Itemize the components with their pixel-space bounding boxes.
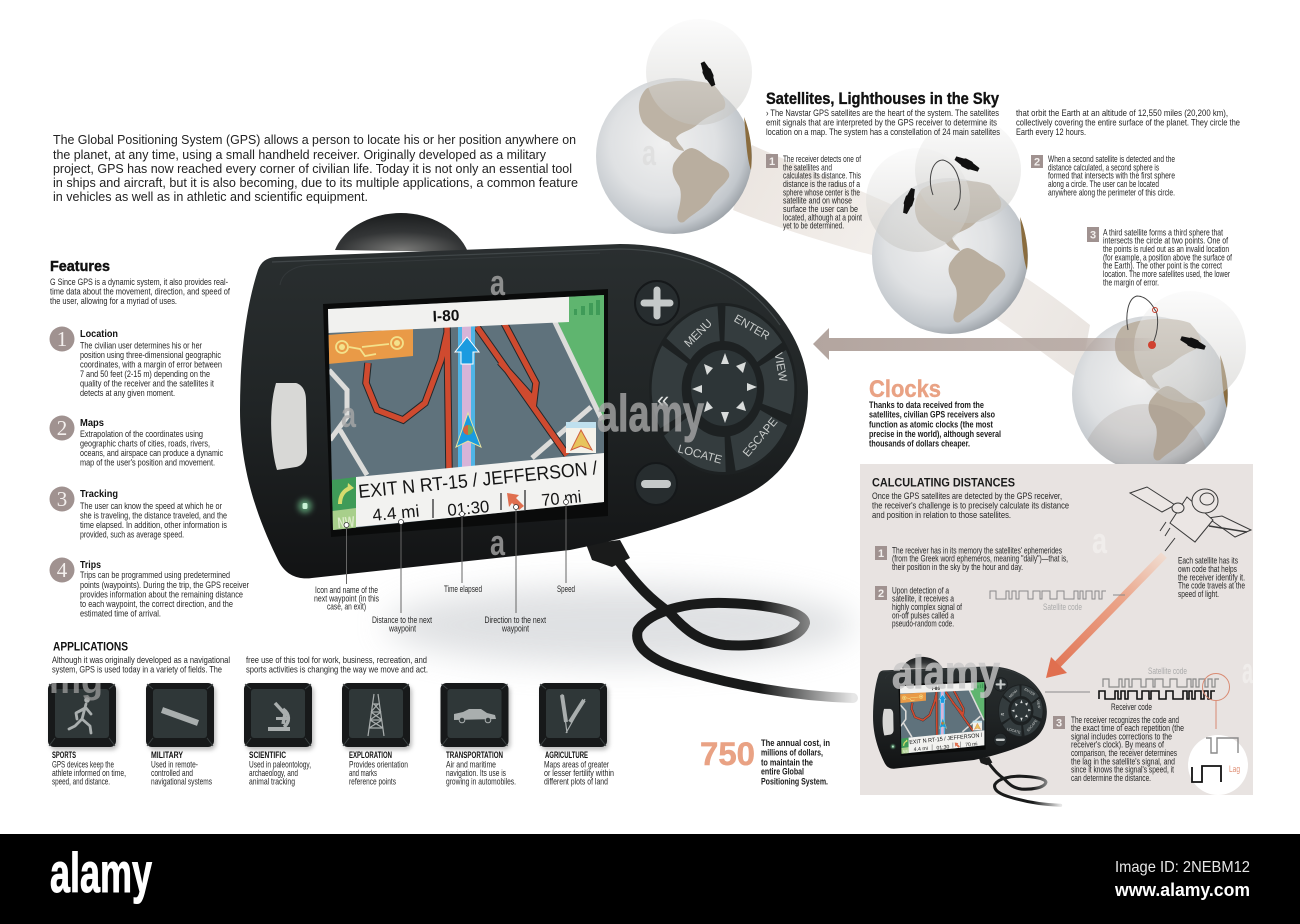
feature 3: tracking: 3 bbox=[57, 487, 67, 511]
feature 3: tracking: time elapsed. In addition, other information is bbox=[80, 520, 227, 530]
callout: direction: waypoint bbox=[501, 624, 529, 634]
callout: distance: waypoint bbox=[388, 624, 416, 634]
application: agriculture: different plots of land bbox=[544, 776, 608, 786]
feature 4: trips: 4 bbox=[57, 558, 68, 582]
feature 3: tracking: provided, such as average speed. bbox=[80, 530, 184, 540]
features heading: Features bbox=[50, 258, 110, 275]
feature 3: tracking: Tracking bbox=[80, 489, 118, 500]
panel intro: and position in relation to those satellites. bbox=[872, 510, 1011, 520]
device shadow bbox=[385, 585, 855, 665]
calc step 3: receiver's clock). By means of bbox=[1071, 740, 1164, 750]
intro text: the planet, at any time, using a small handheld receiver. Originally developed as a military bbox=[53, 148, 547, 162]
watermarks: a bbox=[490, 262, 506, 303]
calc step 2 bbox=[875, 585, 962, 629]
calc step 1 bbox=[875, 545, 1068, 572]
application: military: navigational systems bbox=[151, 776, 212, 786]
application: scientific: Used in paleontology, bbox=[249, 760, 311, 770]
annual cost stat: Positioning System. bbox=[761, 776, 828, 786]
feature 4: trips: Trips bbox=[80, 560, 101, 571]
callout: next waypoint icon: case, an exit) bbox=[327, 602, 366, 612]
application: agriculture: AGRICULTURE bbox=[545, 750, 588, 760]
applications intro: free use of this tool for work, business, recreation, and bbox=[246, 655, 427, 665]
callout: next waypoint icon: next waypoint (in this bbox=[314, 593, 379, 603]
arrow: position to device bbox=[813, 328, 1152, 360]
lag detail bbox=[1188, 674, 1248, 795]
step 2: distance calculated, a second sphere is bbox=[1048, 162, 1159, 172]
callout: next waypoint icon: Icon and name of the bbox=[315, 585, 378, 595]
step 1: yet to be determined. bbox=[783, 221, 844, 231]
calc step 2: pseudo-random code. bbox=[892, 619, 954, 629]
satellite code wave bbox=[990, 591, 1125, 612]
panel intro: Once the GPS satellites are detected by the GPS receiver, bbox=[872, 491, 1062, 501]
application: transportation: Air and maritime bbox=[446, 760, 496, 770]
application: exploration bbox=[342, 683, 412, 786]
step 3: A third satellite forms a third sphere that bbox=[1103, 227, 1223, 237]
feature 4: trips bbox=[50, 558, 249, 618]
satellites body text: Earth every 12 hours. bbox=[1016, 127, 1086, 137]
panel intro bbox=[872, 491, 1069, 520]
features intro: the user, allowing for a myriad of uses. bbox=[50, 296, 177, 306]
watermarks: a bbox=[341, 394, 357, 435]
feature 4: trips: estimated time of arrival. bbox=[80, 608, 161, 618]
note: satellite code: own code that helps bbox=[1178, 564, 1237, 574]
application: transportation: growing in automobiles. bbox=[446, 776, 516, 786]
feature 1: location: coordinates, with a margin of error between bbox=[80, 360, 222, 370]
satellites body text: that orbit the Earth at an altitude of 12,550 miles (20,200 km), bbox=[1016, 108, 1228, 118]
annual cost stat: millions of dollars, bbox=[761, 748, 823, 758]
step 1: distance is the radius of a bbox=[783, 179, 861, 189]
feature 1: location: 1 bbox=[57, 327, 67, 351]
calc step 3: 3 bbox=[1056, 718, 1062, 730]
feature 4: trips: to each waypoint, the correct direction, and the bbox=[80, 599, 233, 609]
annual cost stat: The annual cost, in bbox=[761, 738, 830, 748]
feature 2: maps: oceans, and airspace can produce a dynamic bbox=[80, 448, 223, 458]
note: satellite code bbox=[1178, 556, 1245, 599]
application: sports: SPORTS bbox=[52, 750, 76, 760]
calc step 2: Upon detection of a bbox=[892, 585, 950, 595]
image id: Image ID: 2NEBM12 bbox=[1115, 859, 1250, 876]
step 1: sphere whose center is the bbox=[783, 187, 860, 197]
application: military: Used in remote- bbox=[151, 760, 198, 770]
feature 1: location: Location bbox=[80, 329, 118, 340]
calc step 3: the exact time of each repetition (the bbox=[1071, 723, 1184, 733]
globe 2 with two spheres bbox=[866, 117, 1028, 334]
application: exploration: reference points bbox=[349, 776, 396, 786]
step 2 bbox=[1031, 154, 1175, 197]
application: military: MILITARY bbox=[151, 750, 183, 760]
watermarks: a bbox=[642, 132, 657, 173]
feature 4: trips: Trips can be programmed using predetermined bbox=[80, 570, 230, 580]
calc step 2: highly complex signal of bbox=[892, 602, 962, 612]
step 1: calculates its distance. This bbox=[783, 171, 861, 181]
watermarks: alamy bbox=[892, 646, 1000, 698]
application: exploration: and marks bbox=[349, 768, 377, 778]
calc step 1: (from the Greek word ephemeros, meaning "daily")—that is, bbox=[892, 554, 1068, 564]
applications intro: Although it was originally developed as a navigational bbox=[52, 655, 230, 665]
satellites body text: location on a map. The system has a constellation of 24 main satellites bbox=[766, 127, 1000, 137]
calc step 1: 1 bbox=[878, 548, 884, 560]
calc step 3: can determine the distance. bbox=[1071, 773, 1151, 783]
application: military bbox=[146, 683, 216, 786]
panel intro: the receiver's challenge is to precisely calculate its distance bbox=[872, 500, 1069, 510]
satellites body text bbox=[766, 108, 1240, 137]
application: transportation: TRANSPORTATION bbox=[446, 750, 503, 760]
device callouts bbox=[314, 500, 575, 634]
step 3: location. The more satellites used, the lower bbox=[1103, 269, 1230, 279]
features intro bbox=[50, 277, 230, 306]
feature 2: maps: Extrapolation of the coordinates using bbox=[80, 429, 203, 439]
feature 2: maps: geographic charts of cities, roads, rivers, bbox=[80, 438, 210, 448]
website: www.alamy.com bbox=[1114, 880, 1250, 900]
applications intro: system, GPS is used today in a variety of fields. The bbox=[52, 664, 222, 674]
applications intro: sports activities is changing the way we move and act. bbox=[246, 664, 428, 674]
callout: distance bbox=[372, 615, 432, 634]
application: sports: athlete informed on time, bbox=[52, 768, 126, 778]
clocks body: thousands of dollars cheaper. bbox=[869, 438, 970, 448]
step 3: the points is ruled out as an invalid location bbox=[1103, 244, 1229, 254]
panel heading: CALCULATING DISTANCES bbox=[872, 476, 1015, 490]
step 1: 1 bbox=[769, 156, 775, 168]
footer bar bbox=[0, 834, 1300, 924]
arrow: signal to receiver bbox=[1046, 555, 1164, 678]
application: sports: speed, and distance. bbox=[52, 776, 110, 786]
feature 1: location: The civilian user determines his or her bbox=[80, 340, 202, 350]
application: sports: GPS devices keep the bbox=[52, 760, 114, 770]
globe 3 with spheres and position point bbox=[1072, 296, 1246, 464]
calc step 1: The receiver has in its memory the satellites' ephemerides bbox=[892, 545, 1062, 555]
watermarks: a bbox=[1242, 650, 1254, 691]
step 3: 3 bbox=[1090, 230, 1096, 242]
panel: satellites, lighthouses in the sky bbox=[766, 90, 1240, 287]
step 2: anywhere along the perimeter of this circle. bbox=[1048, 187, 1175, 197]
panel: calculating distances bbox=[860, 464, 1253, 805]
feature 1: location: 7 and 50 feet (2-15 m) depending on the bbox=[80, 369, 210, 379]
step 3 bbox=[1087, 227, 1232, 287]
feature 3: tracking bbox=[50, 486, 227, 540]
annual cost stat: 750 bbox=[700, 736, 755, 772]
feature 2: maps: map of the user's position and movement. bbox=[80, 458, 215, 468]
calc step 2: on-off pulses called a bbox=[892, 610, 955, 620]
satellites heading: Satellites, Lighthouses in the Sky bbox=[766, 90, 1000, 108]
annual cost stat bbox=[700, 736, 830, 786]
satellite beam bbox=[733, 145, 1090, 380]
callout: direction bbox=[484, 615, 546, 634]
annual cost stat: entire Global bbox=[761, 767, 804, 777]
globe 1 with sphere bbox=[596, 19, 752, 234]
callout: next waypoint icon bbox=[314, 585, 379, 612]
intro text: The Global Positioning System (GPS) allows a person to locate his or her position anywhere on bbox=[53, 133, 576, 147]
intro text: in vehicles as well as in athletic and scientific equipment. bbox=[53, 190, 368, 204]
footer logo: alamy bbox=[50, 841, 152, 904]
callout: speed: Speed bbox=[557, 584, 575, 594]
clocks body: precise in the world), although several bbox=[869, 429, 1001, 439]
satellites body text: › The Navstar GPS satellites are the heart of the system. The satellites bbox=[766, 108, 999, 118]
watermarks: alamy bbox=[597, 385, 704, 443]
step 2: When a second satellite is detected and the bbox=[1048, 154, 1175, 164]
watermarks: a bbox=[1092, 520, 1108, 561]
GPS device with screen, buttons and cable bbox=[240, 213, 853, 698]
feature 1: location: position using three-dimensional geographic bbox=[80, 350, 221, 360]
satellites body text: collectively covering the entire surface of the planet. They circle the bbox=[1016, 118, 1240, 128]
application: sports bbox=[48, 683, 126, 786]
feature 1: location: detects at any given moment. bbox=[80, 388, 175, 398]
features intro: G Since GPS is a dynamic system, it also provides real- bbox=[50, 277, 228, 287]
step 3: (for example, a position above the surface of bbox=[1103, 252, 1232, 262]
note: satellite code: The code travels at the bbox=[1178, 581, 1245, 591]
callout: distance: Distance to the next bbox=[372, 615, 432, 625]
application: military: controlled and bbox=[151, 768, 193, 778]
application: scientific: animal tracking bbox=[249, 776, 295, 786]
step 1 bbox=[766, 154, 862, 231]
step 1: surface the user can be bbox=[783, 204, 858, 214]
note: satellite code: speed of light. bbox=[1178, 589, 1219, 599]
step 2: formed that intersects with the first sphere bbox=[1048, 171, 1175, 181]
application: transportation: navigation. Its use is bbox=[446, 768, 506, 778]
features intro: time data about the movement, direction, and speed of bbox=[50, 286, 230, 296]
step 3: intersects the circle at two points. One of bbox=[1103, 236, 1228, 246]
application: transportation bbox=[440, 683, 516, 786]
feature 4: trips: points (waypoints). During the trip, the GPS receiver bbox=[80, 580, 249, 590]
feature 2: maps: 2 bbox=[57, 416, 67, 440]
calc step 2: 2 bbox=[878, 588, 884, 600]
feature 1: location bbox=[50, 326, 222, 398]
mini GPS receiver bbox=[873, 657, 1061, 805]
calc step 2: satellite, it receives a bbox=[892, 594, 955, 604]
feature 3: tracking: The user can know the speed at which he or bbox=[80, 501, 222, 511]
intro text: project, GPS has now reached every corner of civilian life. Today it is not only an essential tool bbox=[53, 162, 572, 176]
calc step 3 bbox=[1053, 715, 1184, 783]
application: scientific: archaeology, and bbox=[249, 768, 298, 778]
callout: time elapsed: Time elapsed bbox=[444, 584, 482, 594]
step 2: 2 bbox=[1034, 156, 1040, 168]
application: agriculture: or lesser fertility within bbox=[544, 768, 614, 778]
clocks body bbox=[869, 400, 1001, 448]
panel: features bbox=[50, 258, 249, 618]
watermarks: a bbox=[490, 522, 506, 563]
feature 2: maps: Maps bbox=[80, 418, 105, 429]
clocks body: function as atomic clocks (the most bbox=[869, 419, 993, 429]
application: agriculture: Maps areas of greater bbox=[544, 760, 609, 770]
calc step 3: since it knows the signal's speed, it bbox=[1071, 765, 1174, 775]
step 1: The receiver detects one of bbox=[783, 154, 861, 164]
satellites body text: emit signals that are interpreted by the GPS receiver to determine its bbox=[766, 118, 997, 128]
application: exploration: Provides orientation bbox=[349, 760, 408, 770]
note: satellite code: Each satellite has its bbox=[1178, 556, 1238, 566]
watermarks: mg bbox=[49, 660, 103, 701]
position point bbox=[1148, 341, 1156, 349]
panel: applications bbox=[48, 642, 614, 786]
code comparison waves bbox=[1099, 666, 1219, 712]
step 2: along a circle. The user can be located bbox=[1048, 179, 1159, 189]
clocks body: satellites, civilian GPS receivers also bbox=[869, 410, 995, 420]
step 3: the margin of error. bbox=[1103, 277, 1159, 287]
panel: clocks bbox=[869, 376, 1001, 448]
application: scientific: SCIENTIFIC bbox=[249, 750, 286, 760]
code comparison waves: Receiver code bbox=[1111, 702, 1152, 712]
icon: satellite bbox=[1130, 487, 1251, 551]
lag detail: Lag bbox=[1229, 764, 1240, 774]
application: scientific bbox=[244, 683, 314, 786]
intro text bbox=[53, 133, 578, 204]
calc step 3: The receiver recognizes the code and bbox=[1071, 715, 1179, 725]
watermarks bbox=[49, 132, 1254, 701]
code comparison waves: Satellite code bbox=[1148, 666, 1187, 676]
feature 1: location: quality of the receiver and the satellites it bbox=[80, 378, 214, 388]
applications intro bbox=[52, 655, 428, 674]
step 1: satellite and on whose bbox=[783, 196, 852, 206]
feature 3: tracking: she is traveling, the distance traveled, and the bbox=[80, 510, 227, 520]
step 1: the satellites and bbox=[783, 162, 832, 172]
annual cost stat: to maintain the bbox=[761, 757, 813, 767]
feature 2: maps bbox=[50, 416, 223, 468]
calc step 3: signal includes corrections to the bbox=[1071, 731, 1172, 741]
clocks heading: Clocks bbox=[869, 376, 941, 403]
application: agriculture bbox=[539, 683, 614, 786]
calc step 3: comparison, the receiver determines bbox=[1071, 748, 1177, 758]
calc step 3: the lag in the satellite's signal, and bbox=[1071, 756, 1175, 766]
step 1: located, although at a point bbox=[783, 212, 862, 222]
calc step 1: their position in the sky by the hour and day. bbox=[892, 562, 1023, 572]
feature 4: trips: provides information about the remaining distance bbox=[80, 590, 243, 600]
step 3: the Earth). The other point is the correct bbox=[1103, 261, 1222, 271]
application: exploration: EXPLORATION bbox=[349, 750, 392, 760]
callout: direction: Direction to the next bbox=[484, 615, 546, 625]
clocks body: Thanks to data received from the bbox=[869, 400, 984, 410]
applications heading: APPLICATIONS bbox=[53, 642, 128, 654]
satellite code wave: Satellite code bbox=[1043, 602, 1082, 612]
intro text: in ships and aircraft, but it is also becoming, due to its multiple applications, a common feature bbox=[53, 176, 578, 190]
note: satellite code: the receiver identify it. bbox=[1178, 572, 1245, 582]
